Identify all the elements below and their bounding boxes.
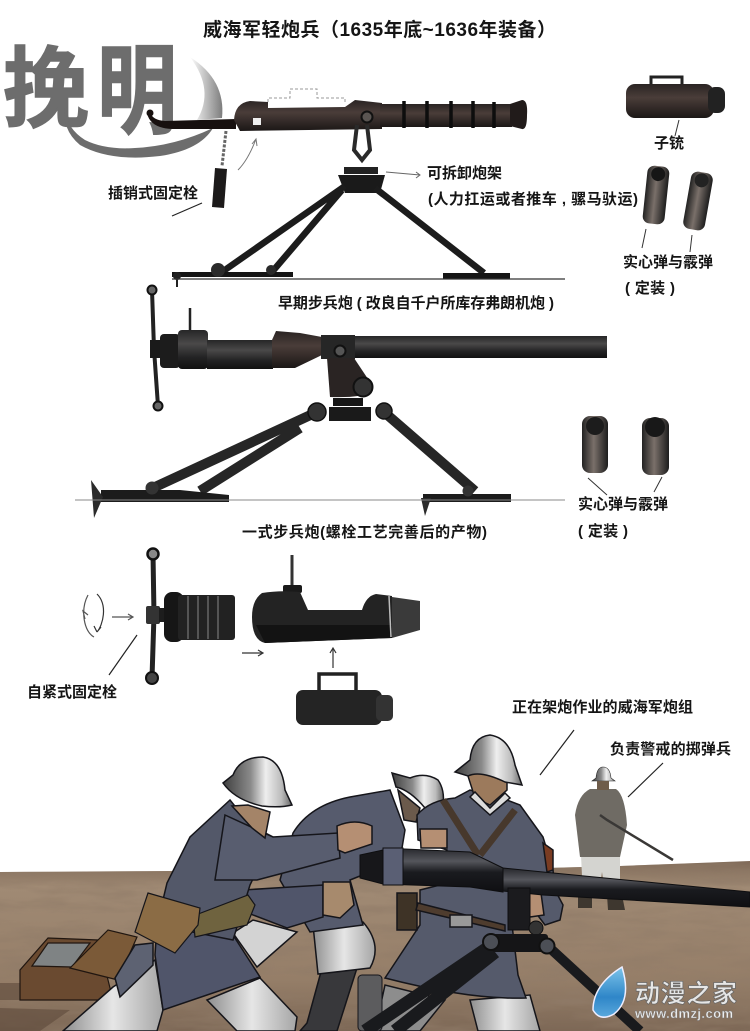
left soldier legs — [63, 920, 297, 1031]
left soldier — [115, 757, 372, 1010]
label: crew: 正在架炮作业的威海军炮组 — [512, 698, 693, 716]
icon: rotation arrows — [83, 594, 104, 637]
logo: brush calligraphy — [3, 36, 222, 158]
pointer: sub-chamber — [675, 120, 679, 136]
foreground cannon — [360, 848, 750, 935]
background grenadier — [575, 767, 673, 910]
logo: brush calligraphy: 明 — [97, 36, 177, 146]
ground — [0, 850, 750, 1031]
label: shells top: 实心弹与霰弹 — [623, 253, 713, 271]
pointer: pin label — [172, 203, 202, 216]
label: shells top: ( 定装 ) — [625, 279, 675, 297]
satchel and belt — [135, 893, 255, 953]
right soldier legs — [375, 985, 540, 1031]
arrow: to bolt — [112, 614, 133, 620]
middle soldier — [280, 773, 443, 1031]
type 1 breech body — [252, 555, 420, 643]
label: shells middle: 实心弹与霰弹 — [578, 495, 668, 513]
watermark: dmzj: www.dmzj.com — [634, 1006, 733, 1021]
pointer: crew — [540, 730, 574, 775]
title: 威海军轻炮兵（1635年底~1636年装备） — [203, 18, 556, 41]
label: carriage: (人力扛运或者推车 , 骡马驮运) — [428, 190, 638, 208]
top gun: carriage tripod — [172, 125, 565, 287]
arrow: pin to gun — [238, 139, 257, 170]
icon: chamber — [296, 674, 393, 725]
pointers: shells top — [642, 229, 692, 252]
right soldier — [385, 735, 563, 998]
top gun: barrel and chamber — [146, 89, 527, 131]
icon: shells top — [642, 165, 714, 231]
arrows: assembly — [242, 648, 336, 668]
self-tightening bolt — [146, 548, 235, 684]
label: shells middle — [578, 495, 668, 540]
label: shells middle: ( 定装 ) — [578, 522, 628, 540]
label: shells top — [623, 253, 713, 297]
pointer: bolt — [109, 635, 137, 675]
small shell on ground — [358, 975, 382, 1031]
middle gun: barrel assembly — [148, 286, 607, 410]
icon: sub-chamber — [626, 77, 725, 118]
arrow: carriage — [386, 172, 420, 178]
label: bolt: 自紧式固定栓 — [27, 683, 117, 701]
label: sub-chamber: 子铳 — [654, 134, 684, 152]
icon: shells middle — [582, 416, 669, 475]
ammo crate — [20, 930, 137, 1000]
label: grenadier: 负责警戒的掷弹兵 — [610, 740, 731, 758]
pointers: shells middle — [588, 477, 662, 495]
label: type 1 gun: 一式步兵炮(螺栓工艺完善后的产物) — [242, 523, 487, 541]
watermark: dmzj — [593, 967, 737, 1021]
middle gun: mount and tripod — [75, 346, 565, 518]
label: early gun: 早期步兵炮 ( 改良自千户所库存弗朗机炮 ) — [278, 294, 554, 312]
pointer: grenadier — [628, 763, 663, 797]
watermark: dmzj: 动漫之家 — [635, 979, 737, 1008]
label: carriage: 可拆卸炮架 — [427, 164, 502, 182]
label: carriage — [427, 164, 638, 208]
foreground tripod — [365, 934, 640, 1031]
label: pin: 插销式固定栓 — [108, 184, 198, 202]
insert pin with chain — [212, 131, 227, 208]
logo: brush calligraphy: 挽 — [3, 40, 89, 139]
